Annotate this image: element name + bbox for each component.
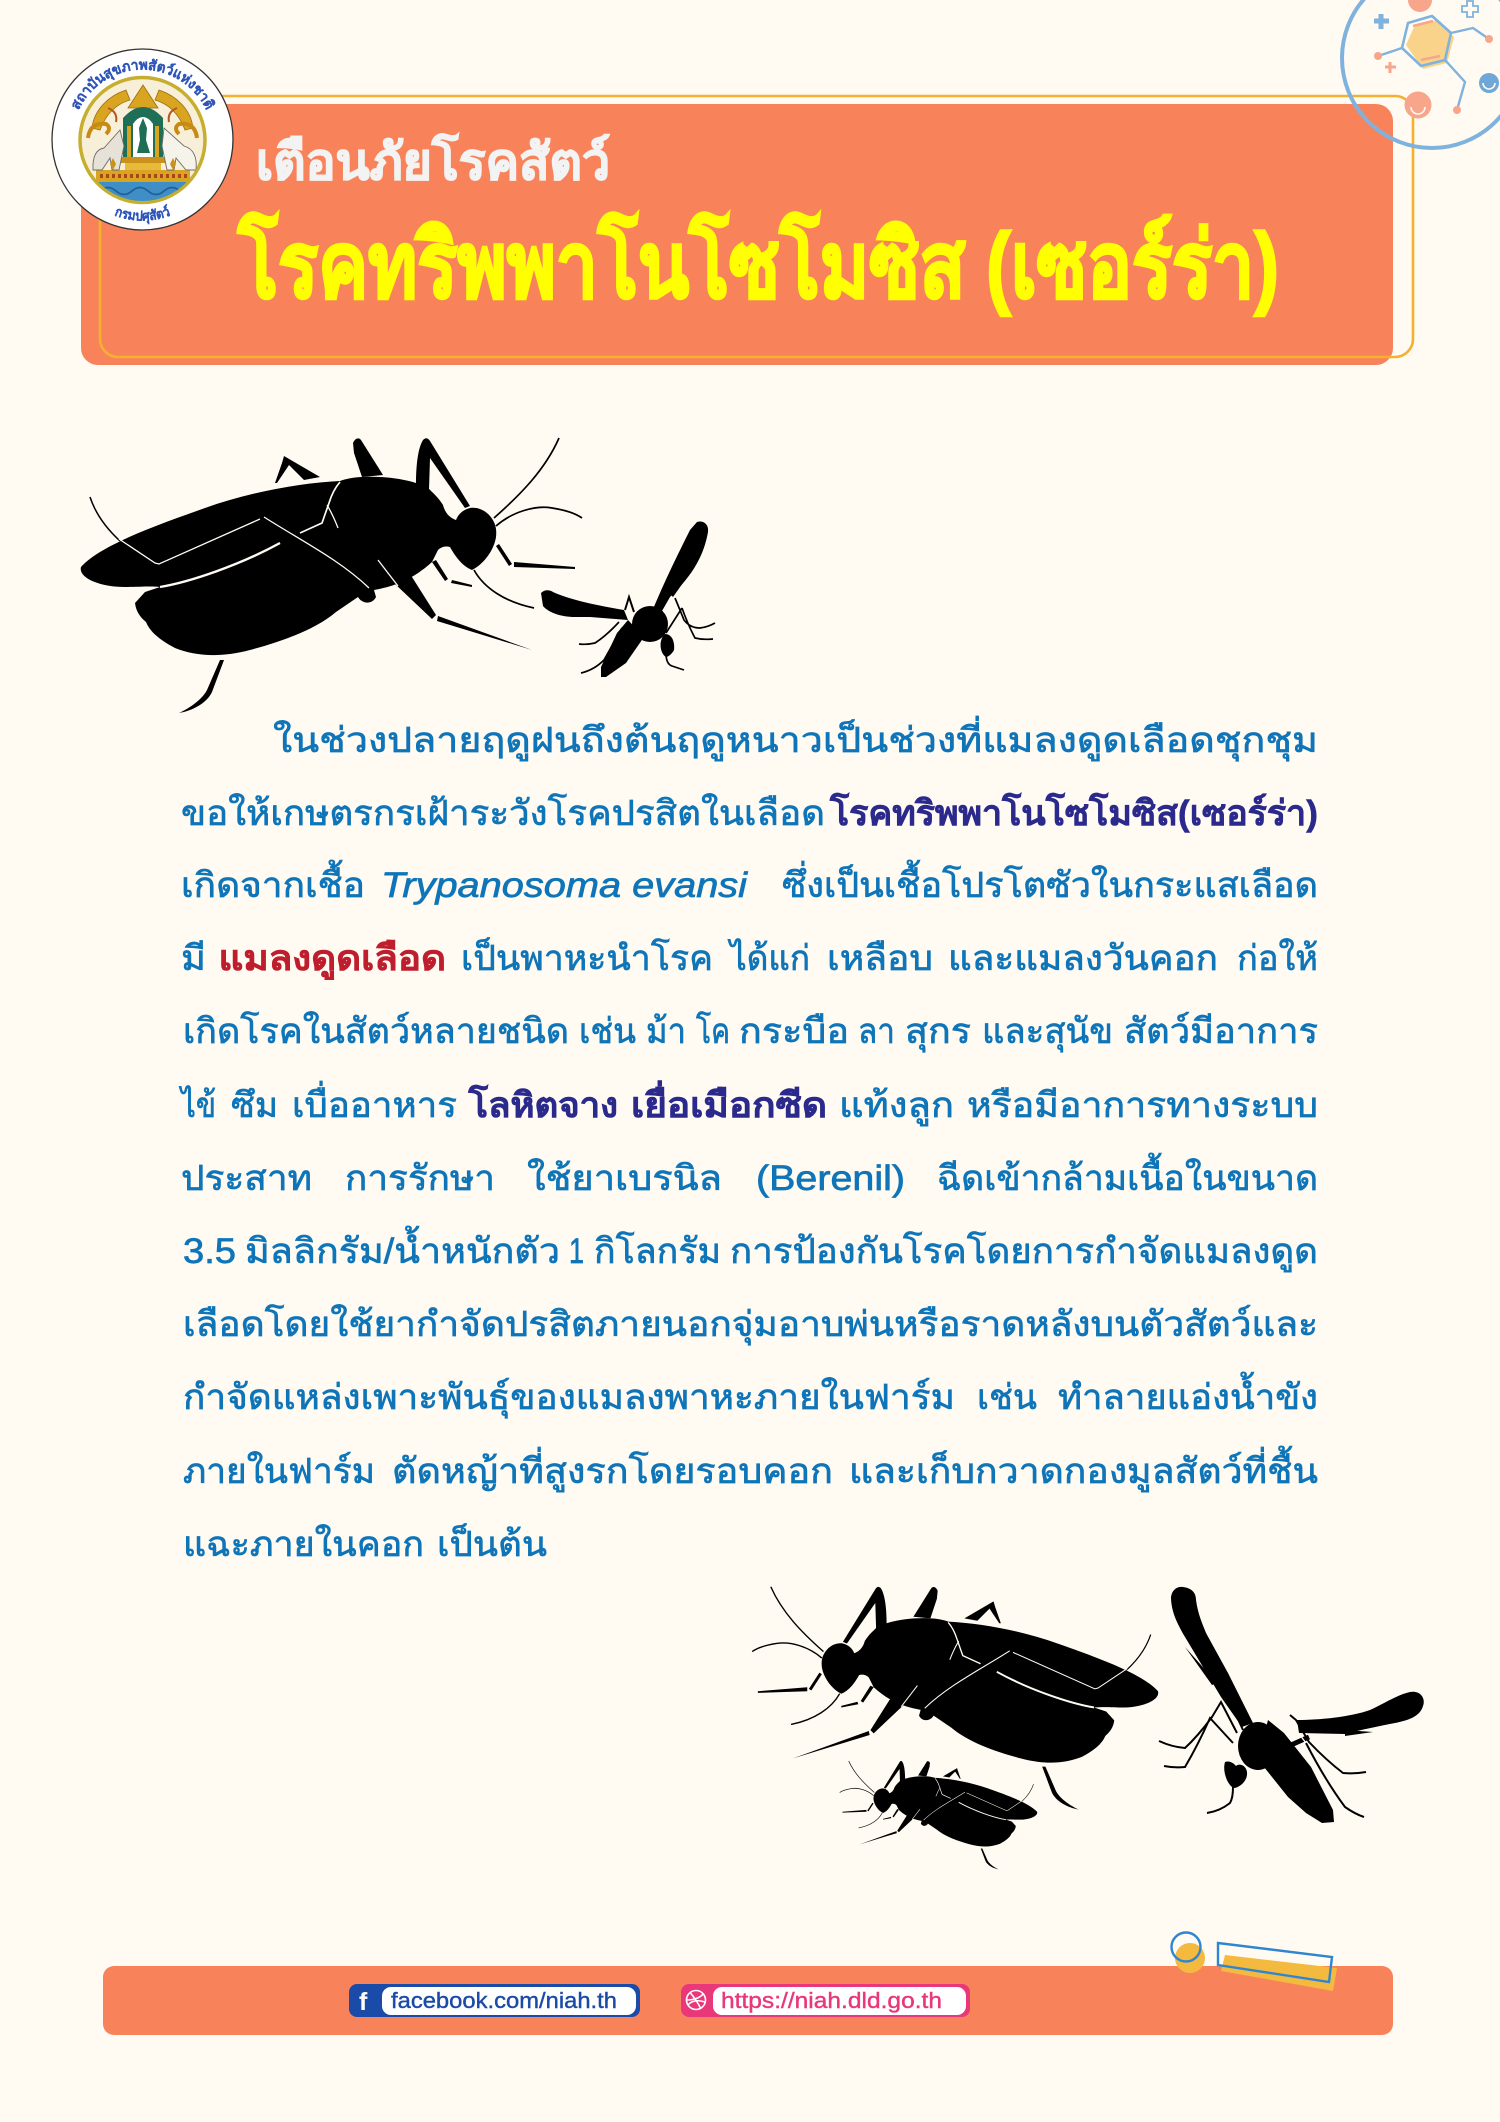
body text: แมลงดูดเลือด: [218, 939, 446, 980]
logo: National Institute of Animal Health seal: [51, 48, 234, 231]
body text: โค: [696, 1011, 730, 1051]
facebook badge: [349, 1984, 640, 2017]
body text: เกิดจากเชื้อ: [181, 859, 365, 905]
body text: เช่น: [579, 1012, 636, 1051]
body text: มิลลิกรัม/น้ำหนักตัว: [245, 1225, 560, 1271]
body text: ซึ่งเป็นเชื้อโปรโตซัวในกระแสเลือด: [782, 859, 1318, 905]
body text: Trypanosoma evansi: [381, 866, 748, 905]
body text: ตัดหญ้าที่สูงรกโดยรอบคอก: [392, 1447, 833, 1492]
logo arc text bottom: กรมปศุสัตว์: [114, 204, 170, 224]
body text: ขอให้เกษตรกรเฝ้าระวังโรคปรสิตในเลือด: [181, 793, 825, 833]
facebook icon: f: [359, 1988, 368, 2016]
body text: 3.5: [183, 1232, 236, 1271]
body text: [178, 716, 1318, 1564]
dribbble globe icon: [686, 1990, 706, 2010]
body text: การรักษา: [345, 1159, 495, 1198]
body text: เบื่ออาหาร: [292, 1081, 457, 1125]
molecule decoration: [1342, 0, 1500, 148]
body text: ซึม: [231, 1086, 278, 1125]
logo arc text top: สถาบันสุขภาพสัตว์แห่งชาติ: [72, 58, 216, 110]
footer decoration: [1172, 1932, 1337, 1991]
body text: กระบือ: [739, 1012, 849, 1051]
body text: สุกร: [905, 1012, 971, 1052]
footer bar: [103, 1966, 1393, 2035]
body text: (Berenil): [756, 1159, 905, 1198]
body text: และแมลงวันคอก: [948, 939, 1218, 978]
body text: เลือดโดยใช้ยากำจัดปรสิตภายนอกจุ่มอาบพ่นหรือราดหลังบนตัวสัตว์และ: [183, 1304, 1318, 1345]
body text: กิโลกรัม: [594, 1231, 721, 1271]
heading: animal disease alert: เตือนภัยโรคสัตว์: [256, 132, 610, 190]
body text: เป็นต้น: [437, 1523, 547, 1564]
body text: เป็นพาหะนำโรค: [461, 937, 713, 978]
illustration: small fly bottom: [840, 1761, 1037, 1869]
body text: การป้องกันโรคโดยการกำจัดแมลงดูด: [730, 1231, 1318, 1272]
body text: ก่อให้: [1237, 938, 1318, 978]
body text: ภายในฟาร์ม: [183, 1451, 375, 1491]
website badge: [681, 1984, 970, 2017]
body text: หรือมีอาการทางระบบ: [967, 1086, 1318, 1125]
body text: มี: [181, 939, 206, 978]
body text: เหลือบ: [827, 939, 933, 978]
illustration: mosquito bottom right: [1159, 1587, 1424, 1823]
body text: ประสาท: [181, 1159, 312, 1198]
body text: ใช้ยาเบรนิล: [527, 1158, 722, 1198]
body text: ในช่วงปลายฤดูฝนถึงต้นฤดูหนาวเป็นช่วงที่แมลงดูดเลือดชุกชุม: [273, 716, 1318, 761]
body text: กำจัดแหล่งเพาะพันธุ์ของแมลงพาหะภายในฟาร์ม: [183, 1377, 955, 1418]
facebook text: facebook.com/niah.th: [391, 1988, 617, 2013]
body text: ไข้: [178, 1085, 216, 1125]
body text: ม้า: [646, 1012, 686, 1051]
main title: โรคทริพพาโนโซโมซิส (เซอร์ร่า): [237, 212, 1279, 317]
body text: ได้แก่: [727, 938, 810, 978]
body text: สัตว์มีอาการ: [1124, 1012, 1318, 1051]
body text: และสุนัข: [982, 1012, 1113, 1052]
body text: ฉีดเข้ากล้ามเนื้อในขนาด: [937, 1152, 1318, 1198]
body text: โลหิตจาง: [467, 1084, 618, 1125]
website text: https://niah.dld.go.th: [721, 1988, 942, 2013]
illustration: small mosquito top: [541, 522, 715, 677]
body text: และเก็บกวาดกองมูลสัตว์ที่ชื้น: [849, 1445, 1318, 1492]
illustration: large fly bottom: [752, 1587, 1158, 1810]
body text: เกิดโรคในสัตว์หลายชนิด: [183, 1011, 569, 1051]
body text: 1: [569, 1232, 584, 1271]
body text: แฉะภายในคอก: [183, 1524, 424, 1564]
body text: เยื่อเมือกซีด: [631, 1080, 827, 1125]
body text: โรคทริพพาโนโซโมซิส(เซอร์ร่า): [829, 792, 1318, 833]
header banner: [81, 96, 1413, 365]
body text: ทำลายแอ่งน้ำขัง: [1058, 1371, 1318, 1417]
illustration: large fly top: [81, 438, 582, 713]
body text: ลา: [858, 1012, 895, 1051]
body text: แท้งลูก: [839, 1086, 954, 1126]
body text: เช่น: [977, 1378, 1037, 1417]
